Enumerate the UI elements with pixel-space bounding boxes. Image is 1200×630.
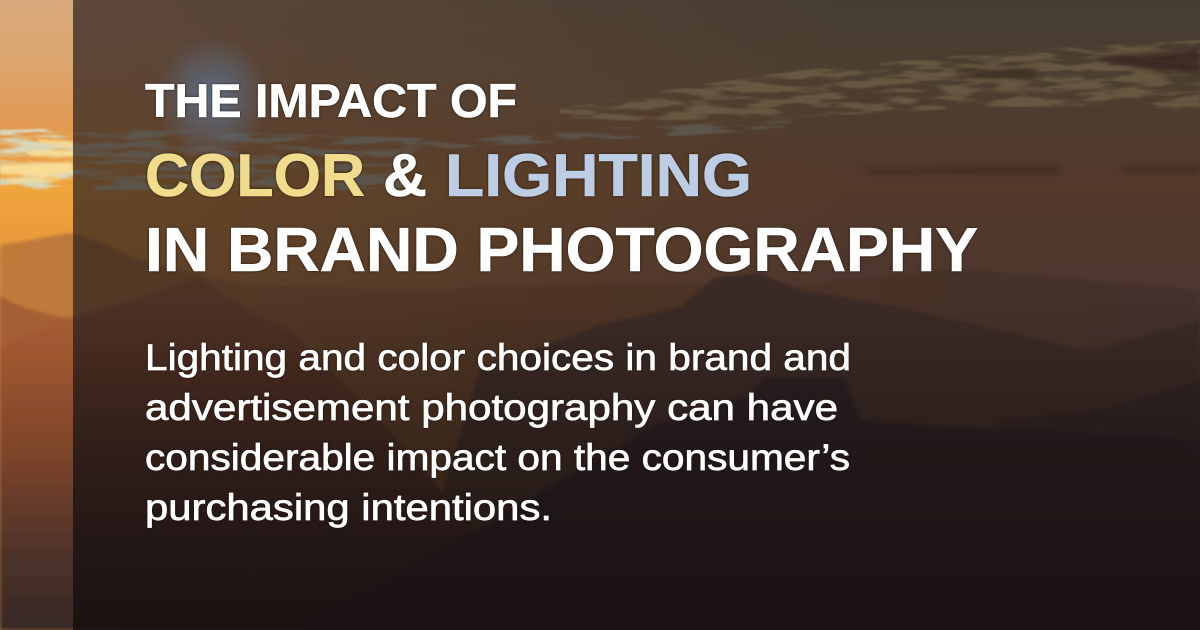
title line 3: IN BRAND PHOTOGRAPHY: [145, 216, 978, 285]
title: [145, 74, 978, 285]
body paragraph: Lighting and color choices in brand and: [145, 337, 851, 378]
dark cloud patches: [860, 48, 1200, 175]
title line 2: LIGHTING: [445, 142, 752, 209]
title line 2: &: [383, 142, 427, 209]
title line 2: COLOR: [145, 142, 365, 209]
body paragraph: considerable impact on the consumer’s: [145, 437, 850, 478]
title line 1: THE IMPACT OF: [145, 74, 517, 127]
ridge behind, in strip: [0, 297, 100, 345]
far ridge: [0, 233, 1200, 630]
body paragraph: advertisement photography can have: [145, 387, 838, 428]
near dark peak and ridge: [300, 377, 1200, 630]
left main ridge: [0, 279, 560, 630]
bright cloud streaks in the strip: [0, 139, 73, 183]
sun glow: [154, 36, 270, 160]
right distant ridges: [400, 273, 1200, 630]
body paragraph: [145, 337, 851, 528]
title line 2: [145, 142, 752, 209]
clouds: [0, 40, 1200, 190]
body paragraph: purchasing intentions.: [145, 487, 552, 528]
